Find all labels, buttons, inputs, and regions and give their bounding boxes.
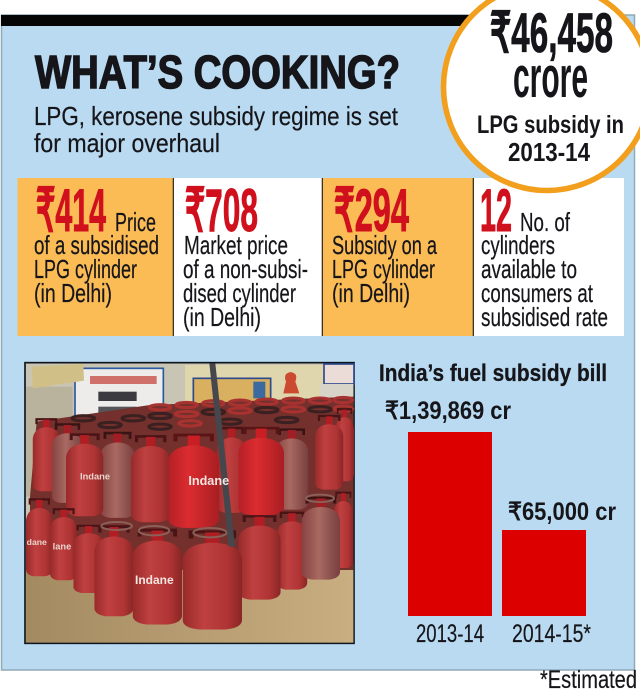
panel: market price: of a non-subsi- [183,254,308,284]
panel: subsidy per cylinder [323,177,473,336]
panel: subsidised price: LPG cylinder [34,254,137,284]
photo: stacked LPG cylinders: Indane [80,471,110,481]
subtitle: for major overhaul [34,128,220,158]
panel: number of cylinders: No. of [520,207,571,237]
panel: number of cylinders: available to [481,254,577,284]
panel: market price [174,177,322,336]
panel: subsidised price [18,177,173,336]
chart title: India’s fuel subsidy bill [379,360,607,387]
panel: number of cylinders: 12 [480,177,512,244]
callout: LPG subsidy circle [444,0,640,190]
photo: stacked LPG cylinders: Indane [135,573,174,587]
title: WHAT’S COOKING? [35,46,400,98]
callout: LPG subsidy circle: 2013-14 [508,137,590,167]
bar: 2013-14: 2013-14 [416,620,484,648]
panel: subsidy per cylinder: Subsidy on a [332,230,437,260]
photo: stacked LPG cylinders: dane [27,537,47,547]
panel: number of cylinders: cylinders [481,230,555,260]
subtitle: LPG, kerosene subsidy regime is set [34,101,399,131]
subtitle [34,101,399,158]
bar chart: India's fuel subsidy bill [379,360,616,648]
panel: subsidy per cylinder: ₹294 [334,177,409,244]
panel: number of cylinders: consumers at [481,278,594,308]
panel: market price: Market price [184,230,288,260]
panel: subsidised price: of a subsidised [34,230,159,260]
panel: market price: dised cylinder [183,278,296,308]
panel: subsidised price: Price [115,207,156,237]
photo: stacked LPG cylinders: Indane [188,474,229,488]
photo: stacked LPG cylinders [25,363,354,643]
bar: 2014-15: 2014-15* [512,620,591,648]
black top bar [1,15,471,26]
panel: subsidy per cylinder: LPG cylinder [332,254,435,284]
panel: subsidised price: ₹414 [36,177,106,244]
panel: subsidy per cylinder: (in Delhi) [332,278,410,308]
panel: number of cylinders [474,177,624,336]
bar: 2013-14: ₹1,39,869 cr [385,397,511,425]
panel: market price: (in Delhi) [183,302,261,332]
bar: 2014-15 [502,498,616,648]
photo: stacked LPG cylinders: lane [53,541,71,551]
bar: 2014-15: ₹65,000 cr [508,498,616,526]
bar: 2013-14 [385,397,511,648]
panel: market price: ₹708 [185,177,258,244]
panel: subsidised price: (in Delhi) [34,278,112,308]
